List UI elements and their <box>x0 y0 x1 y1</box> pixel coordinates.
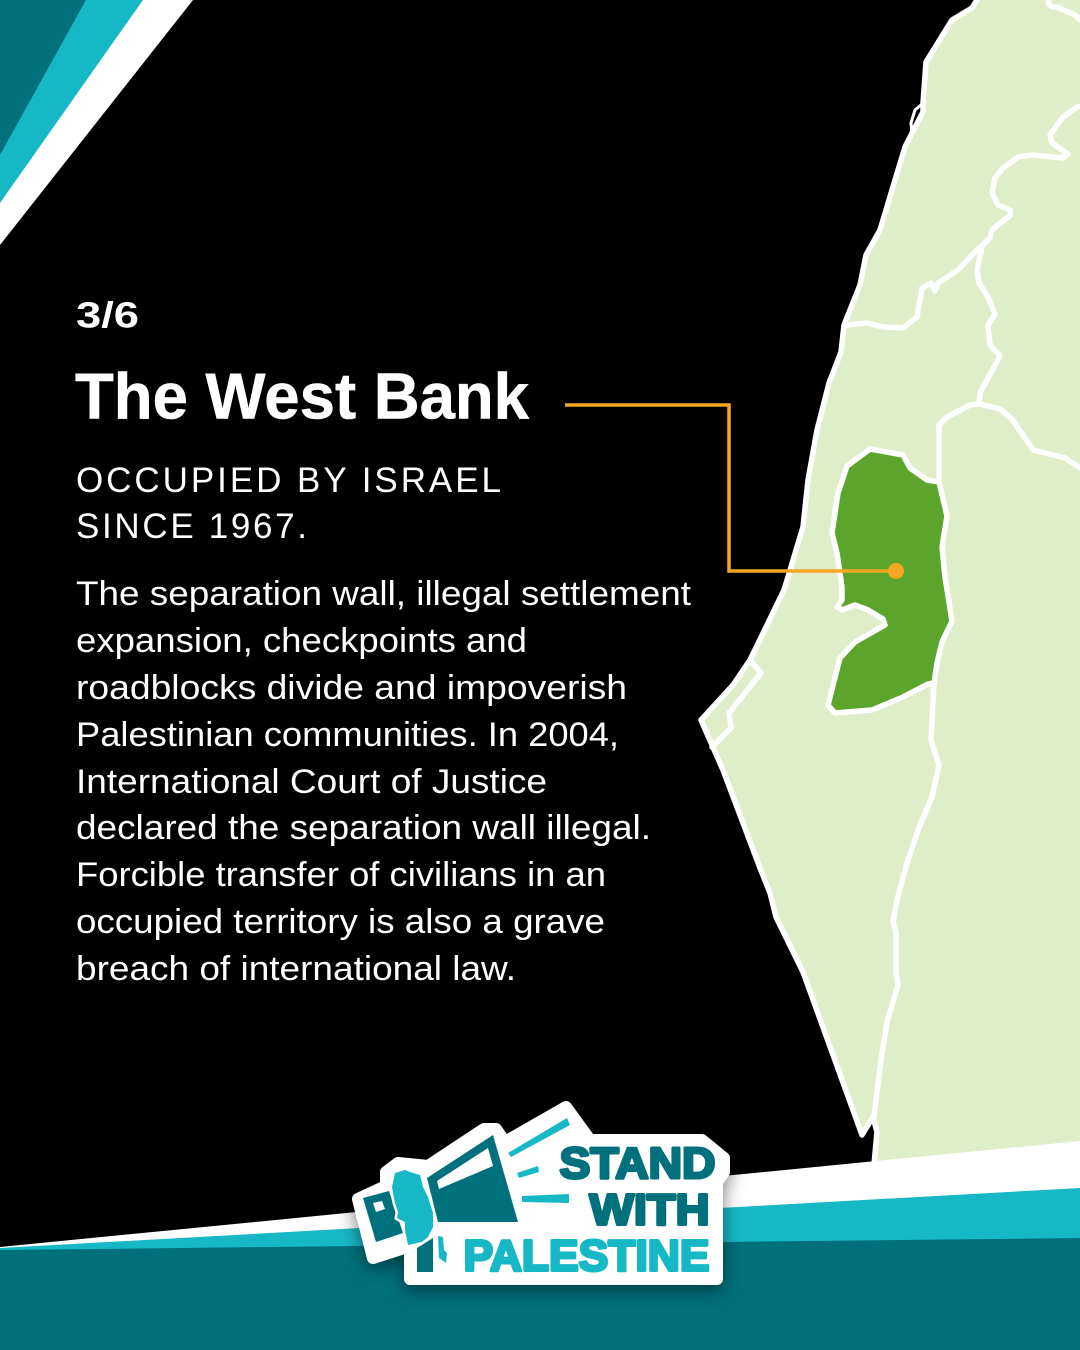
body text: Forcible transfer of civilians in an <box>76 856 606 894</box>
body text: Palestinian communities. In 2004, <box>76 716 619 754</box>
body text: roadblocks divide and impoverish <box>76 669 627 707</box>
logo: Stand With Palestine sticker <box>358 1107 724 1280</box>
page counter: 3/6 <box>76 294 139 336</box>
corner stripes <box>0 0 193 245</box>
logo wordmark <box>464 1139 716 1280</box>
southern border <box>874 683 939 1117</box>
northern borders <box>847 105 1080 328</box>
body text: occupied territory is also a grave <box>76 903 605 941</box>
bottom bands <box>0 1141 1080 1350</box>
title: The West Bank <box>75 360 530 432</box>
land mass and coastline <box>701 0 1080 1175</box>
icon: sound rays <box>508 1118 570 1203</box>
subtitle: OCCUPIED BY ISRAEL <box>76 461 501 500</box>
logo wordmark: WITH <box>590 1186 710 1234</box>
body text: International Court of Justice <box>76 763 547 801</box>
Haifa bay loop <box>911 104 922 133</box>
body text: breach of international law. <box>76 950 516 988</box>
icon: megaphone <box>363 1135 518 1272</box>
Gaza strip <box>712 660 761 747</box>
body text: declared the separation wall illegal. <box>76 809 651 847</box>
subtitle: SINCE 1967. <box>76 507 307 546</box>
sticker background <box>358 1107 724 1279</box>
northeast corner border <box>1048 0 1080 24</box>
body text: expansion, checkpoints and <box>76 622 527 660</box>
West Bank <box>828 449 952 713</box>
eastern border <box>939 404 1080 482</box>
central border <box>977 247 1000 404</box>
callout leader line with dot <box>565 405 904 579</box>
subtitle <box>76 461 501 546</box>
map: land with borders <box>701 0 1080 1175</box>
logo wordmark: STAND <box>560 1139 716 1188</box>
body text <box>76 575 692 988</box>
icon: Palestine map <box>392 1170 447 1263</box>
body text: The separation wall, illegal settlement <box>76 575 692 613</box>
logo wordmark: PALESTINE <box>464 1232 710 1280</box>
